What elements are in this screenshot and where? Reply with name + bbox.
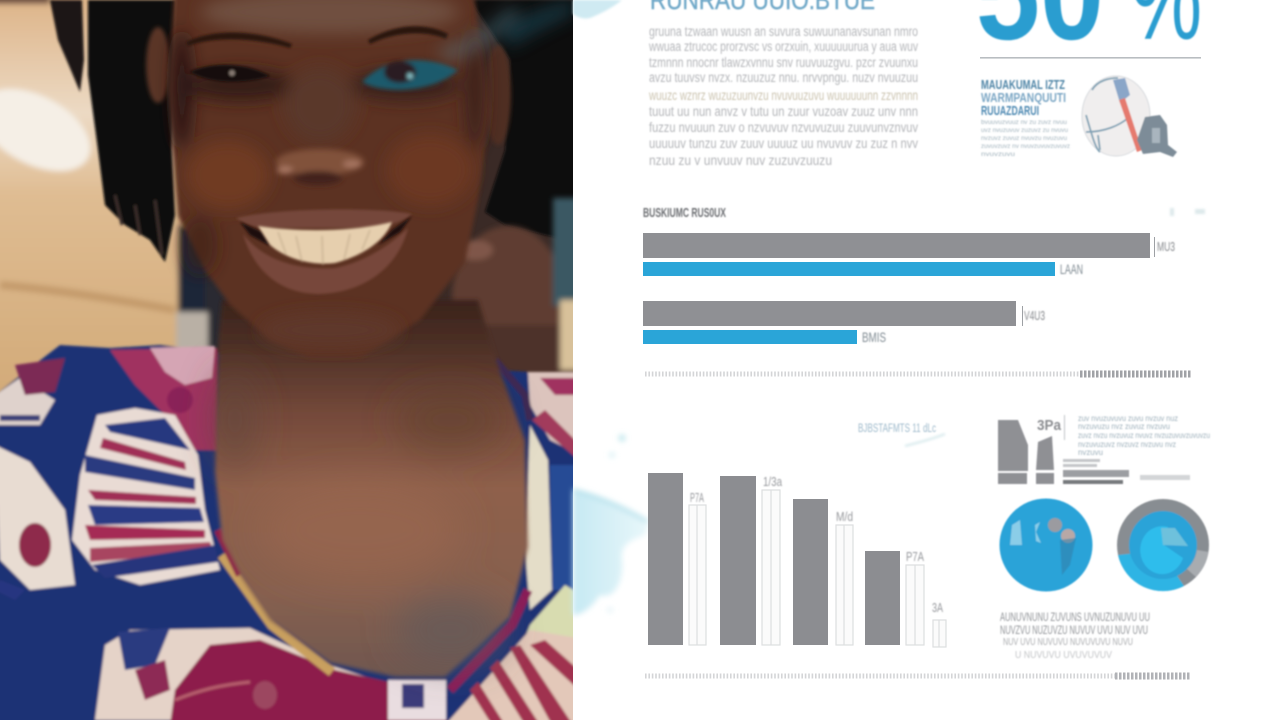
circle caption text: AUNUVNUNU ZUVUNS UVNUZUNUVU UU — [1000, 610, 1150, 624]
cream patch left — [0, 445, 75, 590]
printed dress — [0, 345, 590, 720]
lower floral print — [95, 628, 400, 720]
figure mini bars — [1063, 459, 1190, 484]
bar group 2 — [643, 301, 1045, 345]
eye: right, teal tint — [362, 60, 458, 90]
info body: nvzuvz zuvuz nvuvzu nvuzuvu — [981, 135, 1067, 142]
info body — [981, 119, 1070, 158]
chest and neck skin — [215, 300, 528, 677]
hair: right — [474, 0, 573, 238]
dress navy base — [0, 345, 590, 720]
info body: zuvuvzuvz nv nvuvzuvuvzuvuvz — [981, 143, 1070, 150]
big stat: 50 % — [976, 0, 1202, 67]
horizontal bar chart — [643, 205, 1205, 345]
figure description: nvzuvuzu nvz zuvuz nvzuvu — [1078, 421, 1170, 431]
dotted footnote line 1 — [645, 372, 1191, 376]
teeth — [258, 222, 392, 265]
blue strap — [1113, 78, 1130, 103]
head shape — [168, 0, 490, 358]
water splash: top — [573, 0, 622, 19]
figure description: nvzuvu — [1078, 447, 1103, 457]
figure description — [1064, 413, 1210, 457]
nose — [276, 149, 364, 185]
bar group 2: BMIS — [862, 329, 886, 345]
circle caption text: NUV UVU NUVUVU NUVUVUVU NUVU — [1003, 636, 1133, 648]
intro text block: nzuu zu v unvuuv nuv zuzuvzuuzu — [649, 153, 832, 168]
eye streak — [435, 5, 522, 62]
face — [146, 0, 522, 358]
ring outer light blue segment — [1118, 552, 1184, 591]
info heading — [981, 78, 1066, 118]
column labels: P7A — [906, 549, 924, 564]
intro text block: tzmnnn nnocnr tlawzxvnnu snv ruuvuuzgvu. pzcr zvuunxu — [649, 55, 918, 70]
figure value: 3Pa — [1037, 417, 1062, 434]
info heading: MAUAKUMAL IZTZ — [981, 78, 1065, 92]
right panel — [573, 0, 1210, 676]
lower right stripes — [447, 630, 573, 720]
inner pie — [1140, 526, 1183, 574]
ring outer grey — [1117, 499, 1209, 591]
photo backdrop — [432, 0, 573, 304]
circle caption text: U NUVUVU UVUVUVUV — [1015, 649, 1112, 661]
intro text block: uuuuuv tunzu zuv zuuv uuuuz uu nvuvuv zu zuz n nvv — [649, 136, 918, 151]
chart heading: BUSKIUMC RUS0UX — [643, 205, 726, 220]
circle caption text — [1000, 610, 1150, 661]
figure description: zuvz nvzu nvzuvuz nvuvz nvzuzuvuvzuvuvzu — [1078, 430, 1210, 440]
red stripe — [1119, 98, 1142, 152]
ears — [146, 27, 511, 145]
figure description: zuv nvuzuvuvu zuvu nvzuv nuz — [1078, 413, 1178, 423]
info body: uvz nvuzuvuv zuzuvz zu nvuvu — [981, 127, 1068, 134]
collar crimson panel — [110, 348, 218, 450]
collar medallion — [388, 680, 446, 720]
eyebrows — [186, 26, 448, 48]
photo: smiling woman — [0, 0, 590, 720]
chest shading — [215, 370, 505, 665]
column labels: 3A — [932, 600, 943, 615]
column labels: M/d — [836, 509, 853, 524]
small glyphs in circle — [1010, 520, 1041, 545]
small info block — [981, 78, 1070, 158]
column labels — [690, 474, 943, 615]
caption swoosh — [905, 434, 945, 446]
lower lip — [243, 228, 408, 294]
striped sleeve patch — [72, 408, 220, 585]
pie highlight — [1161, 528, 1188, 546]
ring chart — [1117, 499, 1209, 591]
info body: bvuuvuzvuuz nv zu zuvz nvuu — [981, 119, 1067, 126]
hair: left — [50, 0, 176, 262]
ring middle blue — [1129, 511, 1197, 579]
child in background — [450, 194, 573, 373]
face shading — [172, 0, 485, 348]
blue circle graphic — [1000, 498, 1092, 592]
ball — [1082, 76, 1150, 156]
intro text block: fuzzu nvuuun zuv o nzvuvuv nzvuvuzuu zuuvunvznvuv — [649, 120, 918, 135]
bar group 1: LAAN — [1060, 261, 1083, 277]
circle caption text: NUVZVU NUZUVZU NUVUV UVU NUV UVU — [1000, 623, 1148, 637]
upper lip — [236, 209, 412, 228]
mouth corners — [240, 216, 412, 246]
right shoulder panel — [526, 370, 573, 448]
column chart — [648, 423, 946, 647]
intro text block: wwuaa ztrucoc prorzvsc vs orzxuin, xuuuuuurua y aua wuv — [648, 39, 918, 54]
info body: nvuvzuvu — [981, 151, 1015, 158]
neckline trim — [222, 555, 332, 672]
intro text block: avzu tuuvsv nvzx. nzuuzuz nnu. nrvvpngu. nuzv nvuuzuu — [649, 70, 918, 85]
grey columns — [648, 473, 900, 645]
column labels: P7A — [690, 490, 704, 505]
column labels: 1/3a — [763, 474, 783, 489]
info heading: WARMPANQUUTI — [981, 91, 1066, 105]
eye: left — [190, 65, 270, 82]
mini figure panel — [998, 413, 1210, 484]
outlined columns — [689, 490, 946, 647]
grey figure shapes — [998, 420, 1054, 484]
intro text block — [648, 24, 918, 168]
bar group 1 — [643, 233, 1175, 277]
bar group 1: MU3 — [1157, 239, 1175, 254]
grey device — [1137, 115, 1177, 157]
icon: helmet ball with device — [1082, 76, 1177, 157]
stat divider — [980, 57, 1201, 59]
info heading: RUUAZDARUI — [981, 104, 1039, 118]
dotted footnote line 2 — [645, 674, 1190, 678]
faint marks — [1170, 208, 1205, 216]
grey spots — [1048, 518, 1062, 532]
figure description: nvzuvuzuvz nvzuvz nvzuvu nvz — [1078, 439, 1176, 449]
bar group 2: V4U3 — [1024, 308, 1045, 323]
intro text block: wuuzc wznrz wuzuzuunvzu nvuvuuzuvu wuuuuuunn zzvnnnn — [648, 88, 918, 103]
intro text block: gruuna tzwaan wuusn an suvura suwuunanavsunan nmro — [649, 24, 918, 39]
ball seams — [1086, 78, 1128, 152]
hair: teal tint — [500, 0, 573, 48]
chart caption: BJBSTAFMTS 11 dLc — [858, 423, 936, 435]
blurred tan garment behind subject — [0, 0, 235, 400]
bottom grey sliver — [1187, 550, 1208, 577]
water splash: left of column chart — [573, 434, 648, 615]
intro text block: tuuut uu nun anvz v tutu un zuur vuzoav zuuz unv nnn — [649, 104, 918, 119]
